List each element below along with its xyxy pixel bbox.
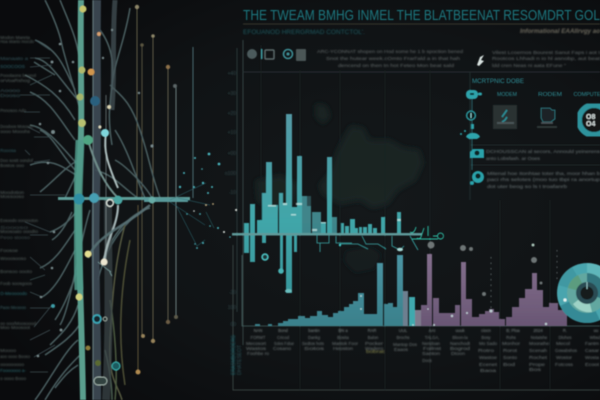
column 7 [422, 328, 442, 363]
column 2: Cricod [277, 335, 290, 340]
donut gauge: O8 [586, 114, 595, 121]
donut chart [557, 263, 600, 323]
purple bars [421, 254, 567, 326]
donut gauge [579, 105, 600, 135]
column 1: Wastos [246, 346, 266, 351]
column 5: RAR [368, 328, 376, 333]
column 12: R. [563, 328, 567, 333]
left labels: Moooo [0, 348, 16, 354]
left labels: Soooso [0, 225, 29, 231]
column 9 [478, 328, 498, 373]
y axis labels: 100 [228, 305, 236, 311]
column 13: Wosta [585, 355, 600, 360]
intro text block: dencend on then tn hot Feteo Mon beat sald [338, 63, 455, 68]
column 12: Wostor [556, 355, 573, 360]
column 9: Wastoe [479, 355, 498, 360]
heading: MCRTPNIC DOBE [472, 79, 524, 85]
description two: dot uter beog so ls t troafanrb [487, 184, 567, 190]
y axis labels: +20 [228, 111, 236, 117]
panel: metrics [460, 79, 600, 190]
left labels: Moo Moosoot [0, 325, 31, 331]
left labels: Pooolaons boonol [0, 73, 36, 79]
left labels: Modon Mareta [0, 35, 30, 41]
network tree: left connectors [20, 40, 65, 372]
icon column [460, 90, 484, 185]
column 10: Sonto [503, 355, 518, 360]
column 13: Ecoot [585, 362, 600, 367]
column 6: UUL [399, 328, 408, 333]
y axis labels [225, 71, 236, 328]
donut gauge: O4 [586, 121, 595, 128]
column 13: uu [594, 328, 599, 333]
left labels: orVoaRshog [0, 78, 30, 84]
vertical legend: DHATESEOT [237, 345, 243, 375]
column 9: Mo Sado [479, 341, 498, 346]
left labels: Aoooo [0, 88, 20, 94]
column 12: Gowabshos [555, 348, 577, 353]
column labels: RODEM [538, 92, 562, 98]
subtitle right: Informational EAAIlrvgy ao [520, 28, 600, 35]
column 11: Scenah [529, 348, 548, 353]
grey and teal bars [403, 291, 408, 326]
description two: Mitenal hoe Itonhtae toter tha, moor hhan b [487, 171, 600, 177]
y axis labels: 00 [230, 322, 236, 328]
column 8: Bogrod [450, 346, 471, 351]
particle field [170, 153, 237, 249]
icon: folder [537, 108, 557, 128]
column 4: Bosita [337, 335, 349, 340]
column 1: NAN [254, 328, 262, 333]
intro text block [317, 49, 464, 68]
column 10: Rorot [503, 348, 518, 353]
column 6: Mantop Dos [393, 342, 417, 347]
left labels: Peoo stooso [0, 235, 30, 241]
right intro text [492, 50, 600, 68]
left labels: SOOCOOS [0, 64, 25, 70]
top icon row [247, 49, 306, 61]
column 1: FORMT [251, 335, 266, 340]
column 3: bantin [308, 328, 320, 333]
column 2: Soles Fobar [274, 341, 295, 346]
column 10 [502, 328, 521, 367]
bar highlights [268, 203, 401, 231]
y axis labels: +10 [228, 130, 236, 136]
right intro text: Vilest Lcoernos Bourest Sanut Faps i aot t [492, 50, 600, 55]
column 5: Wadero [365, 346, 384, 351]
left labels: Pnnosoo Ado [0, 108, 26, 114]
description one [486, 149, 600, 162]
network tree: trunks [78, 0, 150, 400]
left labels: Doodoos Mosooto [0, 124, 33, 130]
column 4: Heoston [333, 346, 354, 351]
column 12 [555, 328, 577, 367]
left labels: Dooso [0, 93, 20, 99]
left labels: Bostos ooo [0, 163, 24, 169]
left labels: Moosoato ooodto [0, 229, 38, 235]
intro text block: Snot the hutear week.cOmto Frarl'ald a in that hah [326, 56, 461, 61]
baseline strip [232, 233, 422, 236]
column 13 [585, 328, 600, 367]
network tree: hub bar [58, 193, 190, 206]
world map silhouette [255, 103, 424, 274]
column 11: Rochet [529, 355, 548, 360]
column 7: AAI [429, 328, 435, 333]
description two [487, 171, 600, 190]
left labels: Rooosa [0, 148, 16, 154]
column 7: TALGA, [425, 335, 439, 340]
left labels: ooooooooo [0, 363, 24, 368]
description two: paci rhs selotes (moo tuo tbpi ra anortup [487, 177, 600, 183]
column 4 [332, 328, 359, 351]
column 9: Baoa [480, 368, 497, 373]
column 8: Dtoon [451, 351, 466, 356]
column 6: Brochs [396, 335, 410, 340]
circuit traces [317, 234, 418, 252]
right intro text: ldd cren Neas ni aata EFune " [492, 63, 566, 68]
pendant markers [262, 254, 268, 260]
column 11: Bos [529, 367, 541, 372]
column 3: Dankg [308, 335, 321, 340]
column 5: Pocker [365, 341, 384, 346]
column 2 [273, 328, 295, 351]
column 11 [529, 328, 550, 372]
column 7: Docs [422, 358, 432, 363]
left labels: Eosoodo ooooooton [0, 218, 38, 224]
column 11: Prope [529, 362, 546, 367]
column 3 [302, 328, 324, 351]
column 5 [365, 328, 385, 354]
column 4: Mantok Foor [332, 341, 359, 346]
column 1: Mecosort [246, 341, 267, 346]
left labels: Wooosooso [0, 256, 26, 262]
column 3: Sedtos hots [302, 341, 324, 346]
description one: DCHOUSSCAN al secors, Annould yeinerens [486, 149, 600, 155]
column 7: Nendoan [422, 341, 441, 346]
column 9: Bosy [481, 335, 492, 340]
column 8: Bloon-la [452, 335, 468, 340]
chart frame lines [233, 24, 600, 390]
column 10: Rohs [506, 335, 516, 340]
left labels: aoo oooo Booso [0, 354, 30, 360]
right intro text: Rootcos Lhhadi n io hl asnobp, aut beat [492, 56, 600, 61]
description one: anto Lobsfash. ar Ooes [486, 156, 541, 162]
y axis labels: -10 [229, 190, 236, 196]
left labels: Foosoe [0, 248, 18, 254]
left labels [0, 35, 38, 382]
left labels: Bonsoo oooto [0, 269, 32, 275]
column 1 [246, 328, 270, 356]
bar sparkles [360, 295, 547, 326]
column 3: Sotos [304, 346, 324, 351]
left labels: o oooo Booo [0, 376, 26, 382]
column 2: Bond [278, 328, 289, 333]
column 9: Rotro [478, 348, 495, 353]
column 5: bobrat [366, 349, 385, 354]
vertical legend: ERASMBOROERG [231, 335, 237, 375]
column labels: COMPUTE [574, 92, 600, 98]
left labels: Mossooso [0, 194, 24, 200]
left labels: Paoo Meoooo [0, 305, 26, 311]
icon: white glyph [477, 55, 484, 66]
column 6: Eaaos [394, 347, 408, 352]
subtitle left: EFOUANOD HRERGRMAD CONTCTOL'. [243, 29, 365, 36]
column 11: 2024 [533, 328, 543, 333]
column 8: uuuk [455, 328, 465, 333]
column 1: Foohbe ro [247, 351, 270, 356]
y axis labels: n100 [225, 171, 236, 177]
left labels: oooo Mooohs [0, 129, 31, 135]
teal squiggle [410, 226, 444, 239]
network tree: nodes [37, 6, 154, 385]
y axis labels: +30 [228, 91, 236, 97]
column 10: Monhor [502, 341, 521, 346]
icon: chain card [493, 105, 517, 129]
column 11: Notatshe [531, 335, 548, 340]
y axis labels: +40 [228, 71, 236, 77]
left labels: Foob soosgoos [0, 281, 33, 287]
column 10: B; Ploa [506, 328, 520, 333]
column 10: Bod [503, 362, 516, 367]
column 12: Dlohes [558, 335, 572, 340]
column 8 [450, 328, 471, 356]
column 11: Moorathe [529, 341, 550, 346]
teal bar chart [232, 114, 422, 293]
left labels: Manaato a [0, 56, 28, 62]
column 12: Fotcoss [555, 362, 573, 367]
left labels: Doo sostt oondof [0, 158, 34, 164]
column 9: Ecenet [479, 362, 498, 367]
left labels: Moodotion [0, 190, 24, 196]
intro text block: ARC-YCONNAT shopen on Hod some he 1 b spoction bened [317, 49, 464, 54]
y axis labels: -20 [229, 290, 236, 296]
column 13: Casar [585, 348, 600, 353]
column 2: Cosano [273, 346, 292, 351]
column 8: Nanchodt [450, 341, 471, 346]
column 6 [393, 328, 417, 352]
y axis labels: +00 [228, 151, 236, 157]
column 12: Mecol [556, 341, 570, 346]
column labels: MODEM [497, 92, 517, 98]
column 5: Balon [368, 335, 379, 340]
left labels: Hoa stoeto mocdo [0, 39, 34, 45]
left labels: Fooooooo a- [0, 368, 26, 374]
network tree: thin vertical lines [135, 5, 193, 375]
left labels: O-Meoooodo [0, 291, 27, 297]
vertical legend [231, 335, 243, 375]
column 4: BN a [338, 328, 348, 333]
left labels: oo ooo/Moosoood [0, 321, 36, 327]
lower bar chart [242, 242, 600, 326]
column labels [497, 92, 600, 98]
network tree: branches [25, 0, 160, 400]
bokeh markers [428, 242, 542, 296]
column 13: Fantm [585, 341, 600, 346]
column 7: Santon [422, 351, 441, 356]
column 7: Foilnst [423, 346, 442, 351]
column 9: ciocn [481, 328, 492, 333]
x axis column text [246, 328, 600, 373]
